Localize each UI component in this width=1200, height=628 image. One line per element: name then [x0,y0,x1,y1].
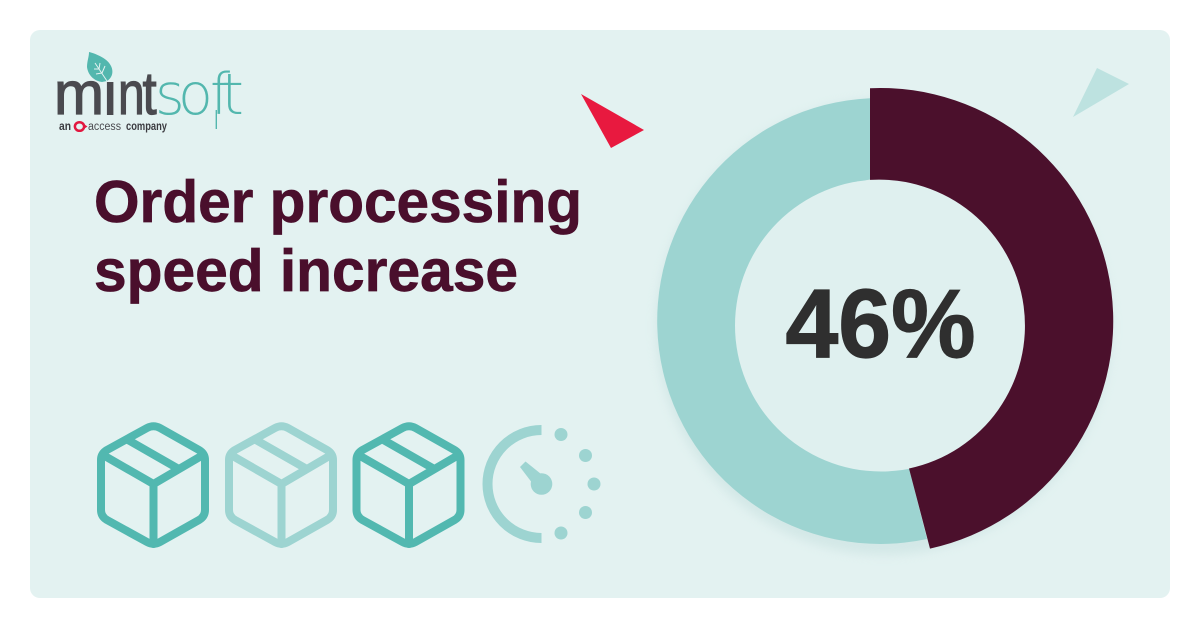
wordmark: soft [155,62,244,129]
tagline: an access company [59,121,167,133]
icon: parcel box 2 [229,426,333,544]
wordmark: mint: i [104,60,117,127]
donut chart [656,88,1113,555]
donut segment: 46% [870,88,1113,549]
wordmark: soft: s [155,62,185,128]
donut drop shadow [656,99,1112,555]
tagline: an access company: access [88,121,121,133]
tagline: an access company: company [126,121,167,133]
heading: speed increase [94,238,518,304]
wordmark: mint: m [54,60,104,127]
wordmark: soft: o [178,62,213,128]
icon: parcel box 1 [101,426,205,544]
tagline: an access company: an [59,121,71,133]
icon: stopwatch gauge [488,428,600,540]
icon: red triangle [581,94,644,148]
value: 46%: 46% [786,269,976,378]
wordmark: mint [57,74,157,116]
icon: parcel box 3 [356,426,460,544]
logo: mintsoft [54,52,244,133]
icon: pale teal triangle [1073,68,1129,117]
wordmark: mint: n [118,60,145,127]
icon: mint leaf [87,52,112,82]
centre circle [735,180,1027,472]
wordmark: mint: t [142,60,157,127]
heading: Order processing [94,169,582,235]
donut segment: remaining [657,98,927,544]
heading [94,169,582,304]
wordmark: soft: f [210,62,230,128]
wordmark: soft: t [222,62,244,128]
